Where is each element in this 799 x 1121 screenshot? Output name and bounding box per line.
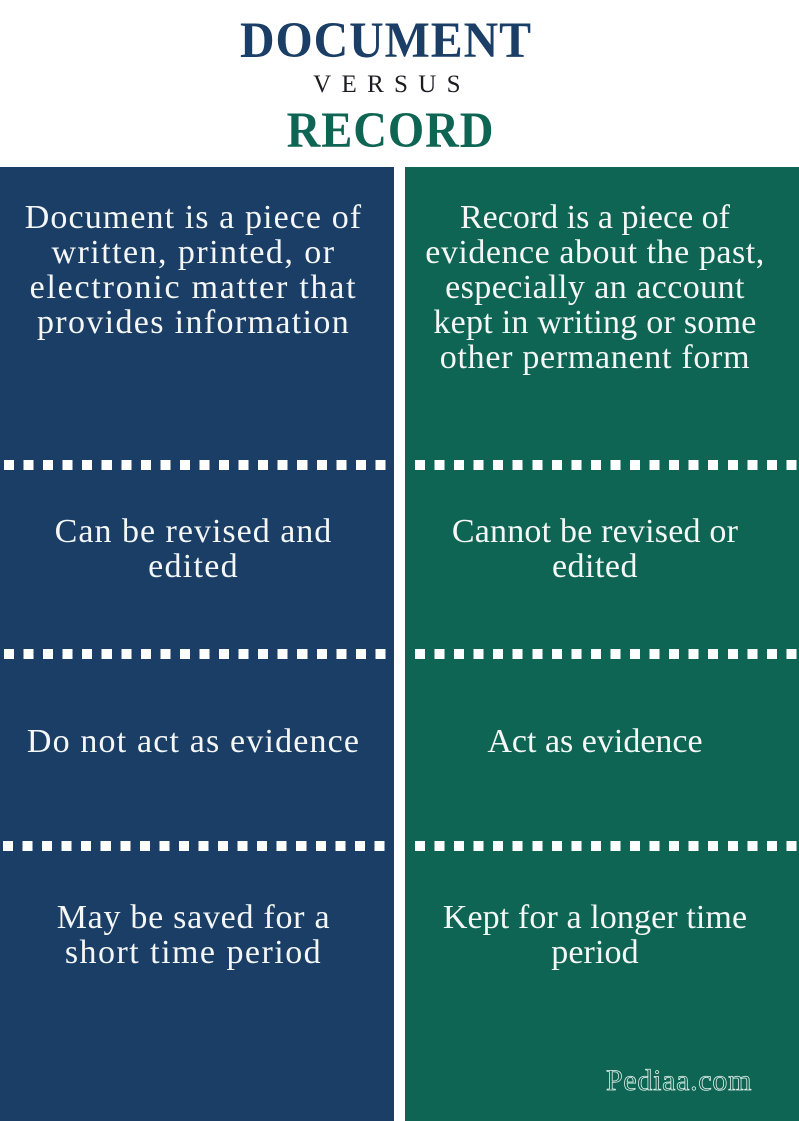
text: record revision: Cannot be revised or — [452, 513, 738, 550]
text: record retention: period — [551, 934, 639, 971]
text: record definition: other permanent form — [440, 339, 750, 376]
text: document retention: short time period — [65, 934, 322, 971]
text: record retention — [443, 899, 747, 971]
text: document definition: Document is a piece of — [25, 199, 362, 236]
text: document revision — [55, 513, 332, 585]
text: document revision: Can be revised and — [55, 513, 332, 550]
text: document evidence: Do not act as evidence — [27, 723, 360, 760]
text: record definition: especially an account — [445, 269, 745, 306]
logo: Pediaa.com: Pediaa.com — [606, 1064, 752, 1096]
text: document definition: electronic matter that — [30, 269, 357, 306]
text: record retention: Kept for a longer time — [443, 899, 747, 936]
divider: dotted row 1 left — [4, 460, 394, 470]
divider: dotted row 3 right — [414, 841, 799, 851]
title: Document: DOCUMENT — [240, 13, 532, 69]
text: record definition: kept in writing or some — [433, 304, 757, 341]
text: record evidence: Act as evidence — [487, 723, 703, 760]
text: document retention — [57, 899, 330, 971]
text: record revision: edited — [552, 548, 638, 585]
panel: document column — [0, 167, 394, 1121]
text: record definition: evidence about the past, — [425, 234, 765, 271]
text: record definition: Record is a piece of — [460, 199, 730, 236]
divider: dotted row 2 right — [415, 649, 799, 659]
text: document definition: provides information — [37, 304, 350, 341]
text: record revision — [452, 513, 738, 585]
text: document definition — [25, 199, 362, 341]
title: Record: RECORD — [287, 103, 494, 159]
divider: dotted row 1 right — [415, 460, 799, 470]
text: document definition: written, printed, or — [52, 234, 335, 271]
text: document retention: May be saved for a — [57, 899, 330, 936]
text: document revision: edited — [148, 548, 239, 585]
subtitle: versus: VERSUS — [313, 71, 471, 98]
divider: dotted row 2 left — [4, 649, 394, 659]
divider: dotted row 3 left — [3, 841, 394, 851]
panel: record column — [405, 167, 799, 1121]
text: record definition — [425, 199, 765, 376]
